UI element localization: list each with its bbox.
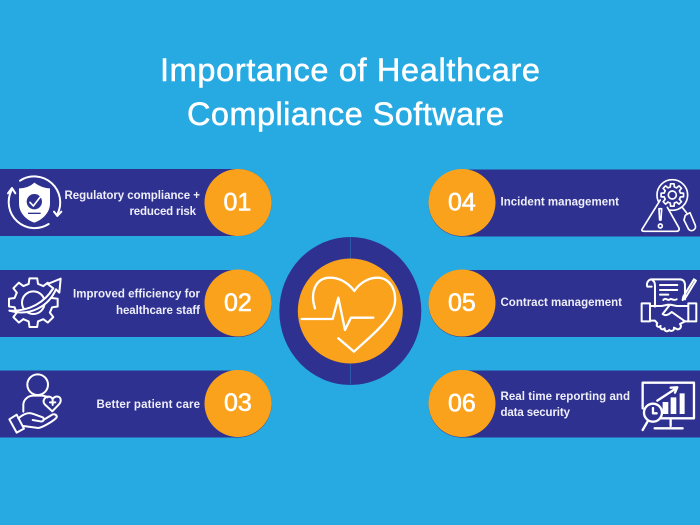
label: improved efficiency: Improved efficiency for — [73, 288, 201, 300]
icon: person held in hand with heart — [9, 374, 61, 433]
label: regulatory compliance: Regulatory compliance + — [64, 190, 200, 202]
number badge 05 — [428, 270, 496, 336]
number badge 06: 06 — [448, 390, 476, 418]
panel: item 01 regulatory compliance — [0, 169, 272, 236]
panel: item 06 real time reporting — [428, 370, 700, 438]
number badge 05: 05 — [448, 289, 476, 317]
number badge 01 — [204, 169, 272, 236]
panel: item 04 incident management — [428, 169, 700, 236]
icon: heart with pulse line — [302, 278, 395, 352]
panel: item 05 contract management — [428, 270, 700, 337]
icon: warning triangle with gear and magnifier — [642, 180, 696, 231]
label: regulatory compliance: reduced risk — [130, 206, 197, 218]
label: improved efficiency — [73, 288, 201, 317]
number badge 02 — [204, 270, 272, 336]
panel: item 02 improved efficiency — [0, 270, 272, 337]
label: better patient care: Better patient care — [96, 399, 200, 411]
number badge 03 — [204, 370, 272, 437]
panel: central heart emblem — [279, 237, 421, 385]
label: improved efficiency: healthcare staff — [116, 305, 200, 317]
icon: monitor with chart and magnifier — [643, 383, 694, 430]
number badge 01: 01 — [224, 188, 251, 216]
label: real time reporting: Real time reporting and — [500, 391, 630, 403]
outer ring — [279, 237, 421, 385]
icon: shield with check — [8, 176, 61, 228]
label: contract management: Contract management — [500, 297, 622, 309]
title: Compliance Software — [187, 96, 504, 132]
label: regulatory compliance — [64, 190, 200, 218]
label: incident management: Incident management — [500, 197, 619, 209]
label: real time reporting — [500, 391, 630, 419]
number badge 02: 02 — [224, 289, 252, 317]
icon: gear with rising arrow — [9, 278, 61, 327]
number badge 06 — [428, 370, 496, 437]
title — [160, 52, 540, 132]
number badge 04 — [428, 169, 496, 236]
label: real time reporting: data security — [500, 407, 571, 419]
title: Importance of Healthcare — [160, 52, 540, 88]
number badge 04: 04 — [448, 188, 476, 216]
orange core — [298, 258, 403, 364]
panel: item 03 better patient care — [0, 370, 272, 438]
number badge 03: 03 — [224, 389, 252, 417]
icon: contract with handshake — [642, 279, 696, 331]
